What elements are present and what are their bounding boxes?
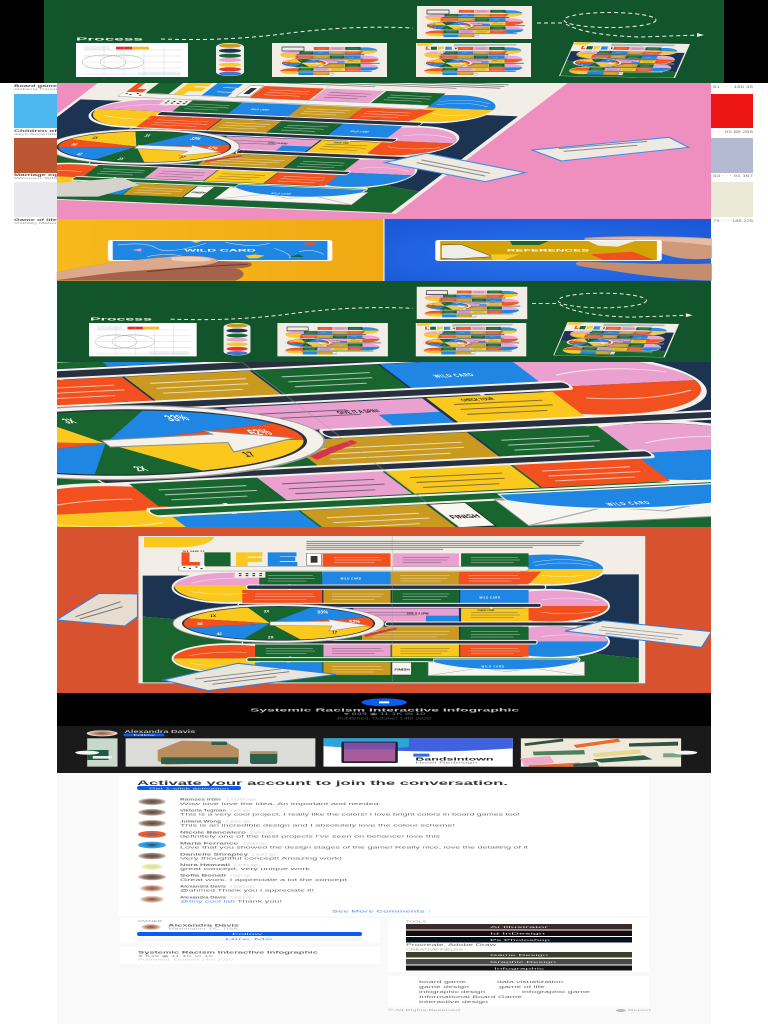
panel: owner: Washington, DC, USA <box>168 926 238 930</box>
comment list: great concept, very unique work <box>180 867 310 871</box>
thumbnail: labels <box>520 738 681 767</box>
panel: board close-up <box>57 362 711 527</box>
thumbnail: Bandsintown: Bandsintown <box>415 757 494 762</box>
right colour swatches: 61 · · · 186 45 <box>713 85 753 89</box>
references card <box>435 240 662 261</box>
panel: tags <box>388 976 649 1007</box>
left colour swatches: Board game <box>14 84 57 88</box>
comment list: @ahmed Thank you I appreciate it! <box>180 888 314 892</box>
panel: tags: infographic game <box>522 990 590 994</box>
comment list: 2 years ago <box>230 874 250 878</box>
follow button: Follow <box>232 932 266 936</box>
panel: board on pink background <box>57 83 711 219</box>
comment list <box>138 798 528 904</box>
project title: Systemic Racism Interactive Infographic <box>250 708 521 713</box>
panel: tags: game design <box>419 985 469 989</box>
publish date: Published: October 14th 2020 <box>337 717 431 720</box>
right colour swatches: · · · 93 88 255 <box>713 130 753 134</box>
right colour swatches: 53 · · · 91 167 <box>713 174 753 178</box>
comment list: Alexandra Davis <box>180 896 226 900</box>
panel: tools and creative fields: Ps Photoshop <box>490 938 551 942</box>
comment list: 2 years ago <box>243 842 267 846</box>
comment list: 1 month ago <box>226 798 256 802</box>
comment list: 2 years ago <box>230 896 254 900</box>
hire me button: Hire Me <box>225 937 275 941</box>
comment list: This is an incredible design and I absolutely love the colour scheme! <box>180 824 455 828</box>
card: left <box>56 593 138 626</box>
carousel arrow right <box>673 751 697 755</box>
left colour swatches: Game of life <box>14 218 57 222</box>
comment list: Great work. I appreciate a lot the concept <box>180 878 347 882</box>
follow button: Follow <box>133 733 155 737</box>
project stats: ♥ 649 ◉ 11.1K ✉ 10 <box>344 712 425 716</box>
panel: tags: game of life <box>499 985 545 989</box>
hire me button <box>137 937 362 941</box>
follow button <box>137 932 362 936</box>
panel: project info: Systemic Racism Interactive Infographic <box>138 950 320 954</box>
panel: tools and creative fields <box>388 918 649 972</box>
panel: comments <box>118 776 649 916</box>
panel: tools and creative fields: Infographic <box>494 966 546 970</box>
comment list: 1 year ago <box>230 808 250 812</box>
comment list: Juliana Wong <box>180 820 221 824</box>
card: centre <box>385 153 525 182</box>
footer: report <box>616 1008 651 1012</box>
comment list: Sofia Bonati <box>180 874 226 878</box>
comment list: Thank you! <box>237 900 282 904</box>
left colour swatches: Children of <box>14 129 59 133</box>
comment list: Love that you showed the design stages of the game! Really nice, love the detailing of it <box>180 846 528 850</box>
comment list: 2 years ago <box>234 863 258 867</box>
second process band <box>57 281 711 362</box>
panel: project info: Published: October 14th 2020 <box>138 958 234 962</box>
comment list: 2 years ago <box>226 820 250 824</box>
panel: tools and creative fields: TOOLS <box>406 920 426 924</box>
thumbnail: packaging <box>126 738 315 767</box>
panel: owner <box>120 918 380 943</box>
comment list: Very thoughtful concept! Amazing work! <box>180 856 342 860</box>
activation button: Get 1-click activation <box>149 786 230 790</box>
comment list: Nicole Bancalero <box>180 830 248 834</box>
comment list: Viktoria Tegman <box>180 808 226 812</box>
wild card <box>108 240 332 261</box>
panel: owner: OWNER <box>138 919 164 923</box>
hand left <box>57 256 252 281</box>
process diagram top <box>76 6 704 78</box>
wild card: WILD CARD <box>184 248 256 252</box>
comment list: 2 years ago <box>250 830 274 834</box>
panel: references card on blue background <box>384 219 712 281</box>
panel: owner: Alexandra Davis <box>168 924 239 928</box>
panel: wild card on yellow background <box>57 219 384 281</box>
panel: tags: Informational Board Game <box>419 995 522 999</box>
panel: tools and creative fields: Ai Illustrator <box>490 925 548 929</box>
panel: tools and creative fields: Procreate, Adobe Draw <box>406 943 497 947</box>
panel: tags: interactive design <box>419 1000 488 1004</box>
panel: project info: ♥ 649 ◉ 11.1K ✉ 10 <box>138 954 214 958</box>
game board <box>138 536 645 683</box>
comments heading: Activate your account to join the conversation. <box>137 780 508 787</box>
page lower background <box>57 773 711 1024</box>
left colour swatches: Visibility Matter <box>14 221 57 225</box>
left colour swatches: days Separate <box>14 132 58 136</box>
comment list: Alexandra Davis <box>180 884 226 888</box>
panel: tools and creative fields: CREATIVE FIELDS <box>406 948 463 952</box>
panel: tags: infographic design <box>419 990 485 994</box>
card: bottom left <box>56 178 140 197</box>
author name: Alexandra Davis <box>124 730 196 735</box>
footer: project title on black <box>57 693 711 726</box>
comment list: 2 years ago <box>252 852 276 856</box>
thumbnail: Bandsintown <box>323 738 513 767</box>
comment list: Nora Hamzati <box>180 863 230 867</box>
panel: tools and creative fields: Id InDesign <box>490 932 546 936</box>
card: right <box>532 137 689 161</box>
appreciate button <box>362 698 407 706</box>
heading: Process lower: Process <box>90 316 154 322</box>
carousel arrow left <box>75 751 99 755</box>
more by author strip <box>57 726 711 773</box>
comment list: Danielle Shrapley <box>180 852 248 856</box>
heading: Process top: Process <box>76 36 145 42</box>
panel: project info <box>120 947 380 964</box>
card: bottom <box>163 663 336 691</box>
comment list: 2 years ago <box>230 884 254 888</box>
hand right <box>576 236 712 281</box>
thumbnail: Bandsintown: Hotel Redesign <box>415 761 478 764</box>
thumbnail: partial <box>87 738 118 767</box>
comment list: @tiny cool lab <box>180 900 235 904</box>
right colour swatches: 79 · · · 188 225 <box>713 219 753 223</box>
footer: report: Report <box>628 1008 651 1012</box>
left colour swatches: Marriage eq <box>14 173 57 177</box>
right colour swatches <box>711 85 753 223</box>
panel: tags: board game <box>419 980 466 984</box>
panel: tags: data visualization <box>497 980 563 984</box>
footer: rights: © All Rights Reserved <box>388 1008 461 1012</box>
comment list: Ramses Irbin <box>180 798 221 802</box>
see more comments link: See More Comments ↓ <box>332 908 432 914</box>
author avatar <box>87 730 118 736</box>
panel: flat board on orange background <box>56 527 711 693</box>
left colour swatches: Women Still <box>14 176 58 180</box>
comment list: This is a very cool project, I really like the colors! I love bright colors in board games too! <box>180 812 520 816</box>
activation button <box>137 786 241 790</box>
left colour swatches: Alabama Transit <box>14 87 57 91</box>
comment list: definitely one of the best projects I've seen on behance! love this <box>180 834 440 838</box>
card: right <box>565 621 711 647</box>
comment list: Wow love love the idea. An important and needed. <box>180 802 381 806</box>
left colour swatches <box>14 84 59 225</box>
comment list: Maria Ferrance <box>180 842 238 846</box>
follow button <box>123 733 165 737</box>
top process band <box>0 0 768 83</box>
panel: tools and creative fields: Game Design <box>490 953 549 957</box>
panel: tools and creative fields: Graphic Design <box>490 960 557 964</box>
references card: REFERENCES <box>507 248 590 252</box>
process diagram lower <box>89 287 693 357</box>
